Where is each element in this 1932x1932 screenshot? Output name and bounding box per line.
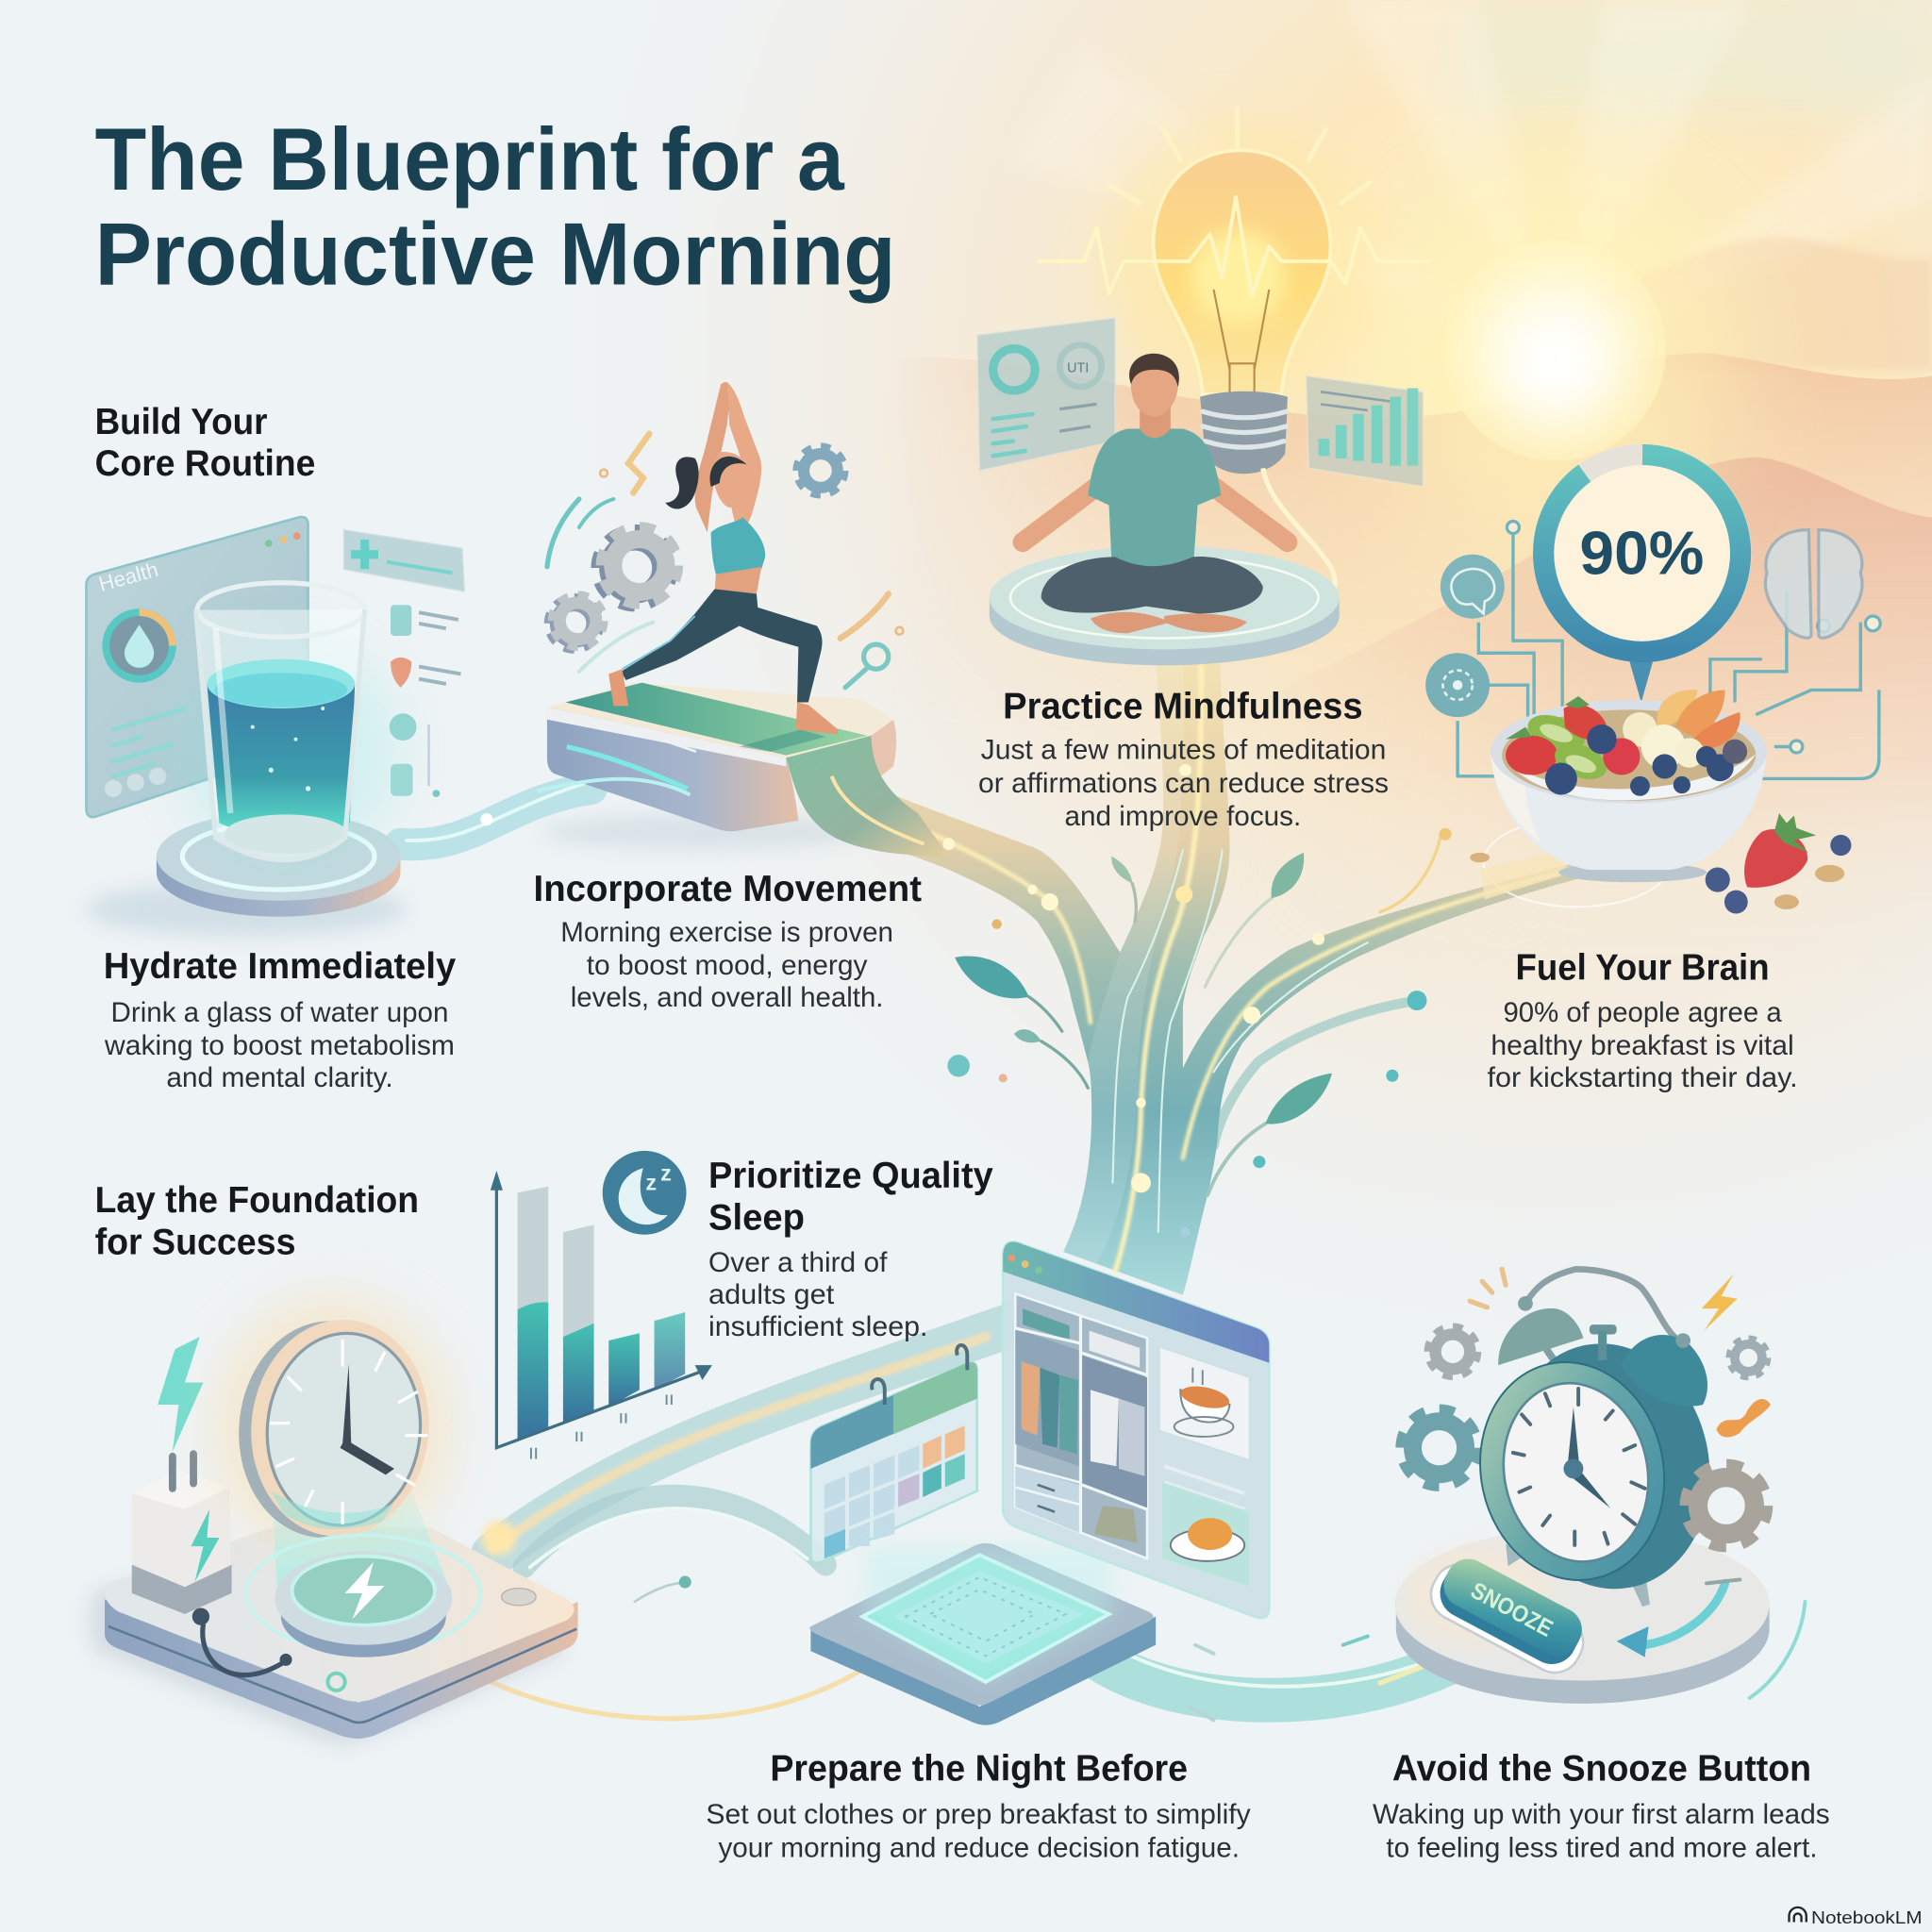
text: Fuel Your Brain: 90% of people agree a: [1503, 997, 1782, 1028]
stream: foundation to night before: [462, 1321, 1023, 1719]
button: snooze: [1422, 1548, 1596, 1682]
arrow: curved teal arrow on disk: [1617, 1579, 1805, 1698]
icon: moon and zzz: z: [645, 1171, 657, 1195]
tree of flowing streams: [801, 653, 1583, 1295]
icon: glowing light bulb: [1038, 108, 1432, 631]
text: Fuel Your Brain: for kickstarting their day.: [1487, 1062, 1798, 1093]
stream: water to yoga block: [400, 774, 616, 844]
text: Fuel Your Brain: [1487, 947, 1798, 1093]
heading: Lay the Foundation for Success: Lay the Foundation: [95, 1180, 419, 1221]
text: Practice Mindfulness: Just a few minutes of meditation: [981, 735, 1386, 766]
icon: fruit beside bowl: [1470, 813, 1851, 913]
icon: charging base with clock: [90, 1297, 578, 1745]
text: Hydrate Immediately: waking to boost metabolism: [104, 1030, 455, 1061]
text: Prepare the Night Before: your morning and reduce decision fatigue.: [718, 1832, 1240, 1863]
text: Avoid the Snooze Button: Avoid the Snooze Button: [1392, 1748, 1811, 1789]
heading: Build Your Core Routine: Build Your: [95, 402, 267, 442]
heading: Build Your Core Routine: Core Routine: [95, 443, 315, 484]
chart: 90% donut callout: [1543, 455, 1741, 702]
icon: small health cards: [343, 530, 464, 796]
text: Prioritize Quality Sleep: Prioritize Quality: [708, 1156, 993, 1196]
text: Practice Mindfulness: and improve focus.: [1064, 801, 1301, 832]
logo: NotebookLM: NotebookLM: [1811, 1907, 1923, 1927]
title: [95, 109, 896, 304]
text: Practice Mindfulness: Practice Mindfulness: [1003, 686, 1363, 726]
heading: Build Your Core Routine: [95, 402, 315, 484]
icon: meditation platform: [990, 546, 1340, 665]
chart: 90% donut callout: 90%: [1579, 519, 1704, 588]
button: snooze: SNOOZE: [1466, 1578, 1557, 1642]
text: Fuel Your Brain: healthy breakfast is vital: [1491, 1030, 1794, 1061]
text: Hydrate Immediately: and mental clarity.: [166, 1062, 393, 1093]
text: Avoid the Snooze Button: [1373, 1748, 1830, 1863]
text: Practice Mindfulness: [978, 686, 1389, 832]
text: Prioritize Quality Sleep: insufficient sleep.: [708, 1311, 928, 1342]
icon: health dashboard panel: [86, 517, 308, 817]
text: Practice Mindfulness: or affirmations can reduce stress: [978, 768, 1389, 799]
icon: calendar: [810, 1345, 977, 1563]
text: Hydrate Immediately: Hydrate Immediately: [104, 946, 457, 987]
text: Prepare the Night Before: [706, 1748, 1251, 1863]
text: Hydrate Immediately: [104, 946, 457, 1093]
text: Incorporate Movement: Incorporate Movement: [534, 869, 922, 909]
title: Productive Morning: [95, 205, 896, 304]
text: Avoid the Snooze Button: Waking up with your first alarm leads: [1373, 1799, 1830, 1830]
text: Prioritize Quality Sleep: [708, 1156, 993, 1342]
icon: left dashboard card: [977, 318, 1115, 471]
text: Incorporate Movement: levels, and overall health.: [571, 982, 883, 1013]
icon: wardrobe planning panel: [1003, 1242, 1269, 1618]
text: Fuel Your Brain: Fuel Your Brain: [1516, 947, 1770, 988]
icon: left dashboard card: UTI: [1067, 360, 1089, 375]
icon: gears around yoga figure: [547, 434, 903, 688]
text: Avoid the Snooze Button: to feeling less tired and more alert.: [1386, 1832, 1818, 1863]
icon: moon and zzz: [603, 1151, 687, 1235]
text: Hydrate Immediately: Drink a glass of water upon: [111, 997, 448, 1028]
text: Prioritize Quality Sleep: Over a third of: [708, 1247, 888, 1278]
stream: night before to snooze: [1096, 1637, 1466, 1720]
chart: sleep bars: [491, 1171, 712, 1458]
text: Prioritize Quality Sleep: adults get: [708, 1279, 835, 1310]
icon: breakfast bowl: [1481, 690, 1767, 907]
heading: Lay the Foundation for Success: [95, 1180, 419, 1263]
heading: Lay the Foundation for Success: for Success: [95, 1223, 295, 1263]
icon: right dashboard card: [1306, 375, 1424, 487]
icon: moon and zzz: z: [660, 1160, 672, 1185]
text: Prepare the Night Before: Set out clothes or prep breakfast to simplify: [706, 1799, 1251, 1830]
text: Incorporate Movement: [534, 869, 922, 1013]
icon: health dashboard panel: Health: [96, 558, 160, 596]
text: Incorporate Movement: Morning exercise is proven: [560, 917, 893, 948]
icon: glowing night platform: [809, 1543, 1156, 1725]
figure: woman in yoga pose: [608, 382, 838, 734]
text: Incorporate Movement: to boost mood, energy: [587, 950, 868, 981]
text: Prioritize Quality Sleep: Sleep: [708, 1198, 805, 1239]
icon: alarm clock on disk: [1395, 1269, 1771, 1704]
icon: yoga block: [537, 683, 949, 857]
figure: meditating person: [1023, 354, 1288, 633]
title: The Blueprint for a: [95, 109, 844, 208]
icon: glass of water on disk: [86, 583, 407, 937]
text: Prepare the Night Before: Prepare the Night Before: [770, 1748, 1188, 1789]
icon: brain circuits: [1425, 521, 1880, 778]
